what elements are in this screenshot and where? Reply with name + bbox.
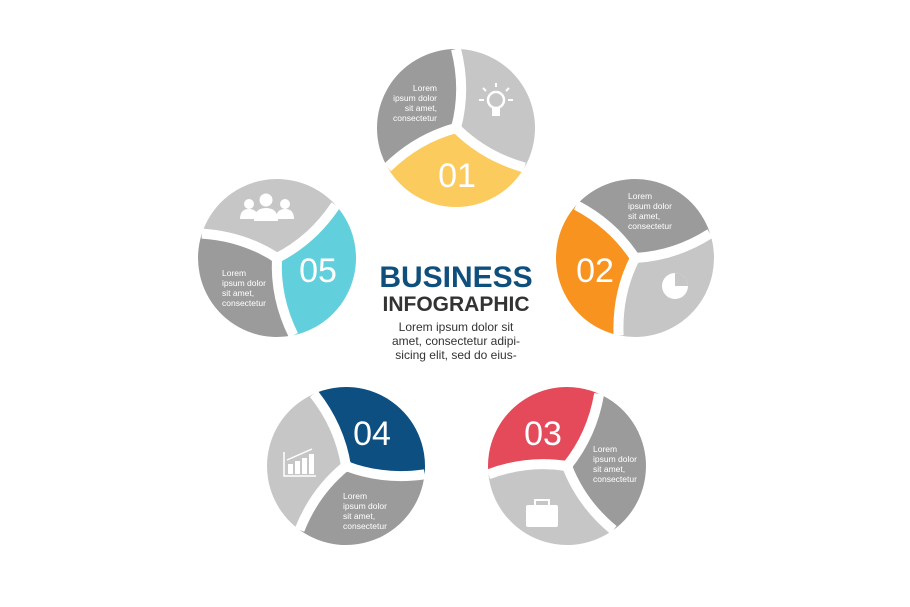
numbers: 05 (299, 252, 337, 290)
circle 3 (457, 356, 677, 576)
body text: Lorem ipsum dolor sit (399, 320, 514, 334)
segment texts: sit amet, (405, 103, 437, 113)
circle 4 (236, 356, 456, 576)
icon: pie (662, 273, 688, 299)
circle 1 (377, 49, 535, 207)
icon: briefcase (526, 500, 558, 527)
segment texts: sit amet, (222, 288, 254, 298)
circle 5 (177, 158, 377, 358)
segment texts: ipsum dolor (222, 278, 266, 288)
icon: people (240, 194, 294, 221)
segment texts: Lorem (222, 268, 246, 278)
segment texts: ipsum dolor (593, 454, 637, 464)
segment texts: sit amet, (343, 511, 375, 521)
title: BUSINESS (379, 261, 533, 294)
title: INFOGRAPHIC (382, 293, 530, 316)
segment texts: Lorem (413, 83, 437, 93)
numbers (299, 157, 614, 453)
segment texts: consectetur (393, 113, 437, 123)
body text: amet, consectetur adipi- (392, 334, 520, 348)
title (379, 261, 533, 316)
segment texts: consectetur (343, 521, 387, 531)
segment texts: ipsum dolor (628, 201, 672, 211)
segment texts: ipsum dolor (343, 501, 387, 511)
segment texts: Lorem (343, 491, 367, 501)
icon: chart (284, 449, 316, 476)
numbers: 03 (524, 415, 562, 453)
numbers: 02 (576, 252, 614, 290)
body text: sicing elit, sed do eius- (395, 348, 517, 362)
segment texts: Lorem (593, 444, 617, 454)
segment texts: sit amet, (593, 464, 625, 474)
numbers: 04 (353, 415, 391, 453)
circle 2 (535, 158, 735, 358)
numbers: 01 (438, 157, 476, 195)
segment texts: consectetur (628, 221, 672, 231)
icon: bulb (479, 83, 513, 116)
segment texts: sit amet, (628, 211, 660, 221)
body text (392, 320, 520, 362)
segment texts: consectetur (593, 474, 637, 484)
segment texts: Lorem (628, 191, 652, 201)
segment texts: consectetur (222, 298, 266, 308)
segment texts: ipsum dolor (393, 93, 437, 103)
segment texts (222, 83, 672, 531)
